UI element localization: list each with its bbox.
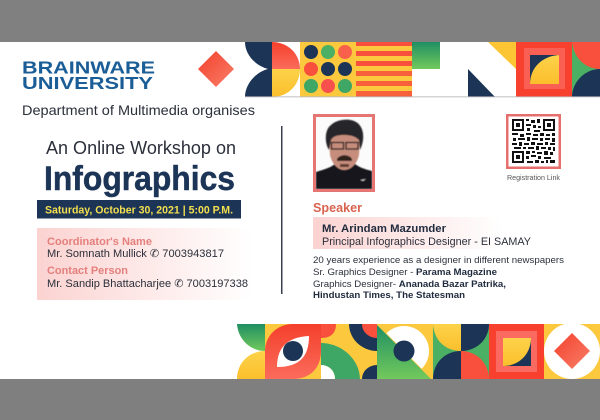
bottom geometric banner xyxy=(237,323,600,379)
green arc xyxy=(321,343,360,379)
concentric red square xyxy=(489,324,544,379)
navy ring xyxy=(349,324,377,351)
top grey band xyxy=(0,0,600,42)
coordinator contact: Mr. Somnath Mullick ✆ 7003943817 xyxy=(47,248,224,260)
dotted yellow square xyxy=(300,42,356,97)
speaker biography: 20 years experience as a designer in different newspapers xyxy=(313,255,564,266)
white circle tile with diamond xyxy=(544,323,600,379)
red leaf with eye xyxy=(265,324,336,379)
vertical divider xyxy=(281,126,282,294)
green rectangle xyxy=(412,42,440,69)
green panel with eye xyxy=(377,325,431,379)
navy quarter xyxy=(362,365,377,379)
yellow panel xyxy=(265,324,433,379)
registration link caption: Registration Link xyxy=(507,173,560,182)
navy half circles xyxy=(245,42,272,97)
title: Infographics xyxy=(44,160,235,198)
navy triangle xyxy=(468,69,495,97)
white quarter xyxy=(321,365,335,379)
green panel with red and navy circles xyxy=(572,42,600,97)
striped panel xyxy=(356,42,412,97)
date bar xyxy=(37,200,241,218)
speaker biography: Graphics Designer- Ananada Bazar Patrika, xyxy=(313,279,506,290)
speaker heading: Speaker xyxy=(313,201,362,215)
icon: red diamond xyxy=(198,51,234,87)
red quarter circle xyxy=(272,42,300,69)
contact heading: Contact Person xyxy=(47,265,128,277)
speaker biography: Hindustan Times, The Statesman xyxy=(313,290,465,301)
yellow half circle xyxy=(237,351,265,379)
workshop subtitle: An Online Workshop on xyxy=(46,138,236,158)
red inner ring xyxy=(362,324,377,338)
top geometric banner xyxy=(198,42,600,97)
logo: Brainware University: UNIVERSITY xyxy=(22,73,153,93)
logo: Brainware University: BRAINWARE xyxy=(22,58,155,78)
contact person: Mr. Sandip Bhattacharjee ✆ 7003197338 xyxy=(47,278,248,290)
bottom grey band xyxy=(0,379,600,420)
panel: speaker name xyxy=(313,217,532,249)
panel: contacts xyxy=(37,228,252,300)
logo: Brainware University xyxy=(22,58,155,93)
date bar: Saturday, October 30, 2021 | 5:00 P.M. xyxy=(45,204,233,216)
speaker biography: Sr. Graphics Designer - Parama Magazine xyxy=(313,267,497,278)
department line: Department of Multimedia organises xyxy=(22,102,255,118)
banner shadow xyxy=(245,96,600,98)
concentric red square xyxy=(516,42,572,97)
leaf tile xyxy=(433,324,461,379)
green leaf xyxy=(237,324,265,351)
speaker biography xyxy=(313,255,564,301)
yellow quarter circle xyxy=(272,69,300,97)
speaker photo xyxy=(313,114,375,192)
yellow triangle xyxy=(488,42,516,69)
speaker name: Mr. Arindam Mazumder xyxy=(322,223,447,235)
speaker role: Principal Infographics Designer - EI SAMAY xyxy=(322,236,532,248)
QR code xyxy=(506,114,561,169)
quarter circles tile xyxy=(461,324,489,379)
coordinator heading: Coordinator's Name xyxy=(47,236,152,248)
